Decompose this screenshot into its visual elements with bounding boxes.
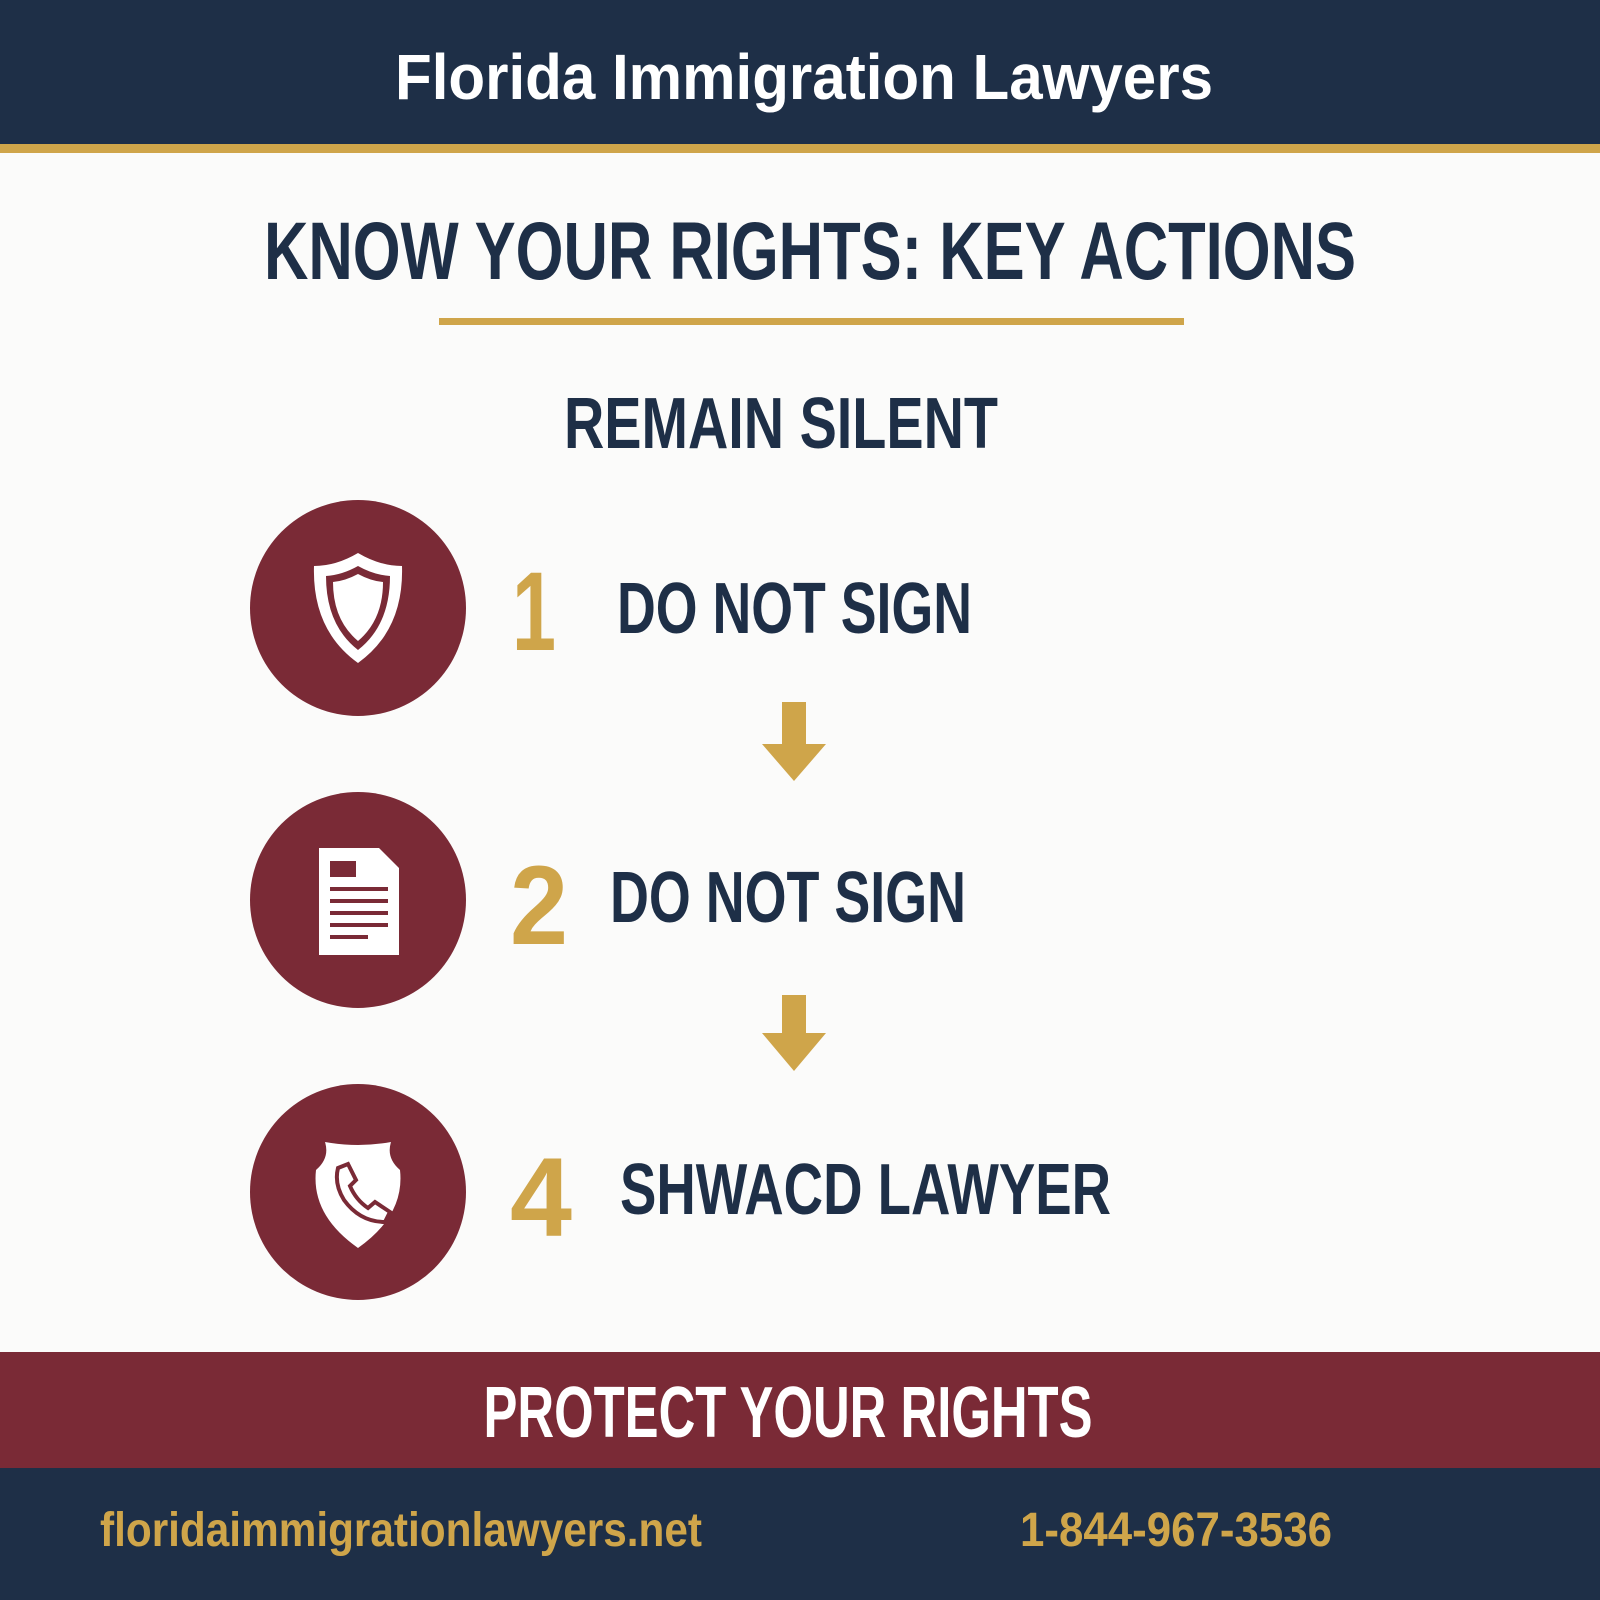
number 4: 4 [510, 1135, 572, 1260]
header title: Florida Immigration Lawyers [395, 41, 1213, 113]
step 2 [250, 792, 966, 1008]
banner: protect your rights: PROTECT YOUR RIGHTS [484, 1373, 1092, 1453]
number 1: 1 [512, 549, 556, 674]
subheading: remain silent: REMAIN SILENT [564, 384, 998, 464]
header bar [0, 0, 1600, 153]
icon: shield [250, 500, 466, 716]
icon: badge phone [250, 1084, 466, 1300]
arrow 1 [762, 702, 826, 781]
number 2: 2 [510, 843, 568, 968]
label: DO NOT SIGN [610, 858, 966, 938]
website: floridaimmigrationlawyers.net [100, 1504, 702, 1557]
phone: 1-844-967-3536 [1020, 1504, 1332, 1557]
label: SHWACD LAWYER [620, 1150, 1111, 1230]
footer [0, 1468, 1600, 1600]
icon: document [250, 792, 466, 1008]
step 3 [250, 1084, 1111, 1300]
label: DO NOT SIGN [617, 569, 972, 649]
arrow 2 [762, 995, 826, 1071]
step 1 [250, 500, 972, 716]
banner: protect your rights [0, 1352, 1600, 1468]
title underline [439, 318, 1184, 325]
